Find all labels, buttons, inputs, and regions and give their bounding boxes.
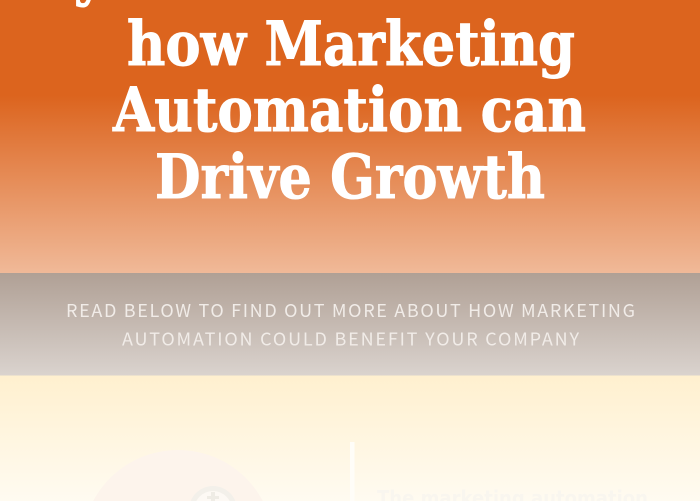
icon: faded circle badge bbox=[82, 450, 274, 501]
panel: cream content section bbox=[0, 376, 700, 501]
title: how Marketing bbox=[127, 9, 575, 80]
panel: grey subtitle band bbox=[0, 273, 700, 376]
title: Automation can bbox=[112, 75, 586, 146]
title bbox=[73, 0, 586, 213]
subtitle text bbox=[66, 297, 635, 352]
divider bar bbox=[350, 442, 354, 501]
subtitle text: READ BELOW TO FIND OUT MORE ABOUT HOW MARKETING bbox=[66, 297, 635, 323]
subtitle text: AUTOMATION COULD BENEFIT YOUR COMPANY bbox=[122, 326, 579, 352]
panel: orange title header bbox=[0, 0, 700, 273]
title: Drive Growth bbox=[155, 142, 545, 213]
